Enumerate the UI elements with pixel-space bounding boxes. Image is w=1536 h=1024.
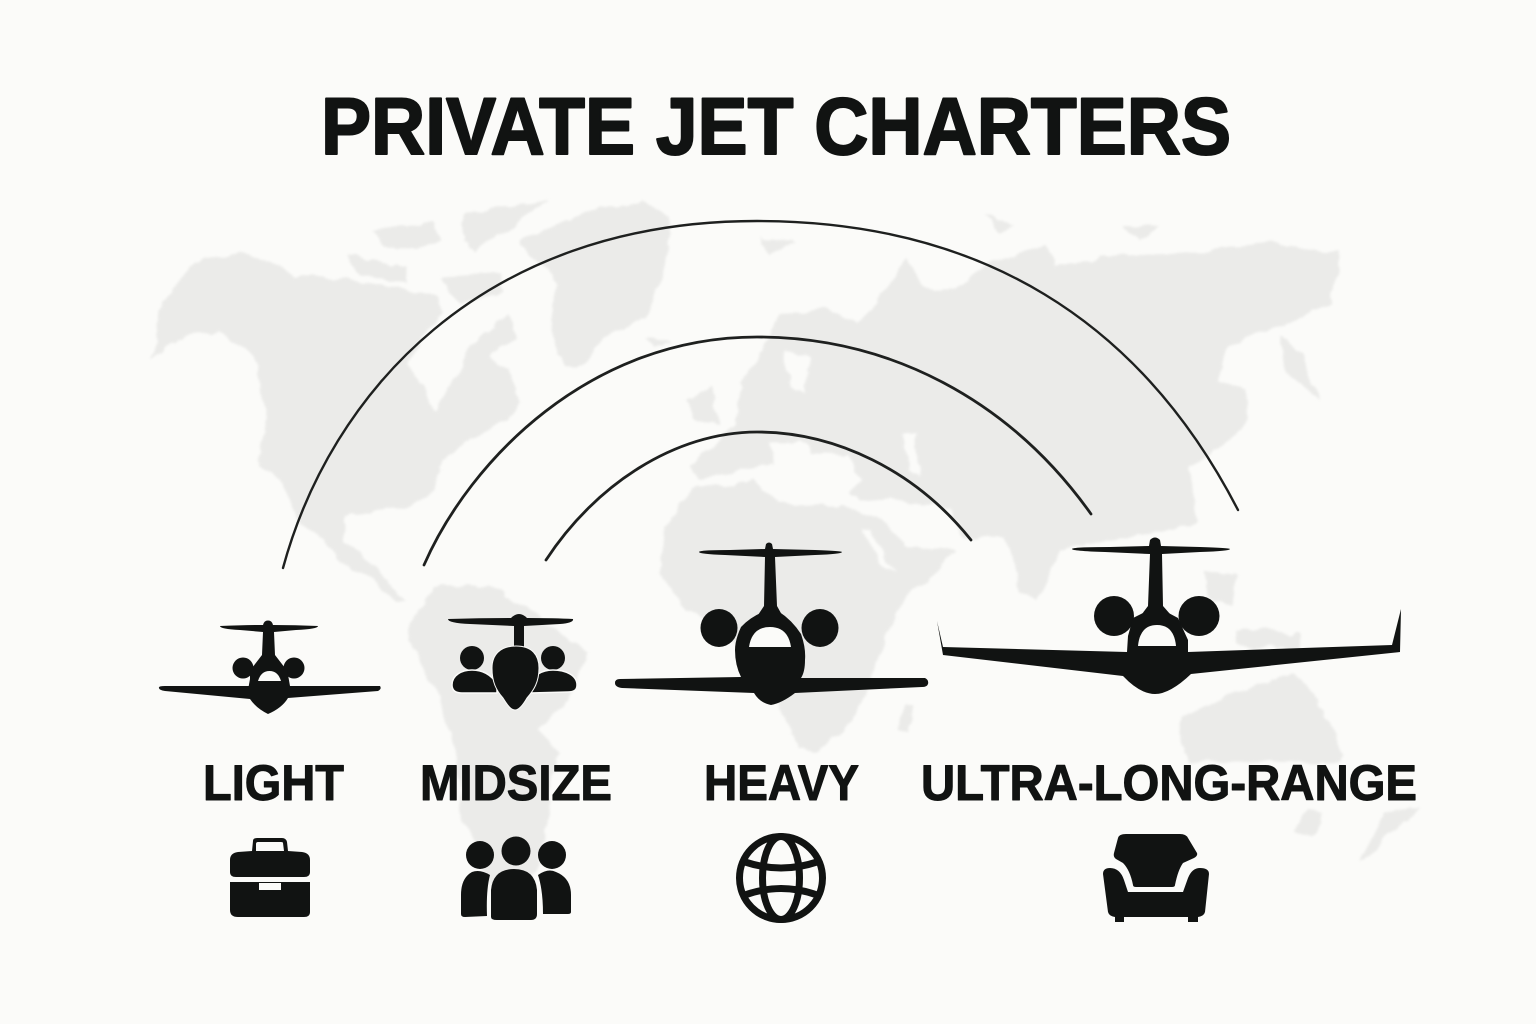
map: Africa [660, 480, 955, 753]
map: Iceland [646, 340, 671, 350]
range arc: midsize [546, 432, 971, 560]
map: New Zealand [1292, 808, 1421, 863]
map: South America [407, 585, 587, 893]
map: Eurasia [687, 243, 1340, 600]
icon: globe [740, 836, 822, 920]
label: ultra-long-range: ULTRA-LONG-RANGE [921, 755, 1417, 811]
label: light: LIGHT [203, 755, 344, 811]
label: midsize: MIDSIZE [420, 755, 612, 811]
jet: ultra-long-range [937, 538, 1401, 694]
jet: midsize [448, 614, 577, 710]
icon: group of people [461, 836, 571, 920]
map: UK and Scandinavia [687, 387, 720, 423]
map: white seas [768, 345, 1262, 570]
jet: heavy [615, 542, 928, 705]
map: North America [150, 252, 520, 603]
range arc: heavy [424, 337, 1091, 565]
range arc: ultra-long-range [283, 221, 1238, 568]
map: Indochina [1205, 573, 1237, 605]
background world map [150, 200, 1421, 893]
title: PRIVATE JET CHARTERS [321, 82, 1231, 172]
icon: briefcase [230, 838, 310, 917]
label: heavy: HEAVY [704, 755, 859, 811]
map: Greenland [520, 202, 671, 367]
map: Japan [1280, 335, 1320, 400]
map: Svalbard and northern islands [760, 213, 1160, 255]
map: Madagascar [897, 703, 914, 735]
map: Arctic islands [348, 200, 548, 303]
icon: armchair [1103, 834, 1209, 922]
map: Indonesia [1233, 630, 1302, 647]
jet: light [159, 620, 381, 714]
map: Australia [1180, 673, 1345, 762]
